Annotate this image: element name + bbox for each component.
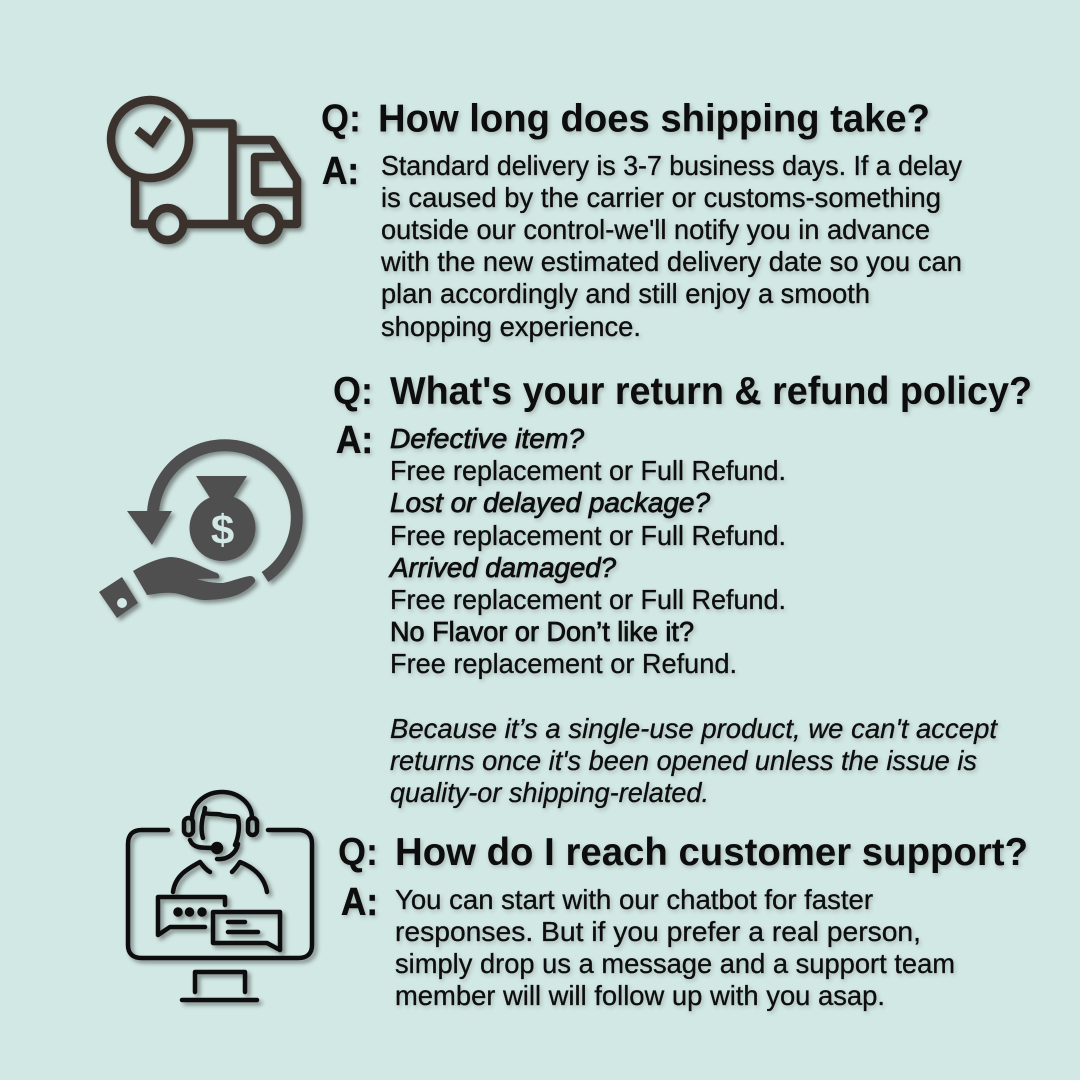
question: support: Q: [338, 831, 378, 874]
answer: shipping [322, 150, 962, 342]
answer: returns: Because it’s a single-use product, we can't accept [390, 713, 998, 744]
faq: support [338, 831, 1028, 1011]
answer: returns: returns once it's been opened unless the issue is [390, 745, 977, 776]
answer: support: A: [341, 881, 378, 924]
question: returns: What's your return & refund policy? [390, 370, 1032, 413]
icon: refund money bag over hand [99, 445, 297, 618]
answer: returns: Free replacement or Full Refund. [390, 520, 786, 551]
answer: returns: A: [336, 419, 373, 462]
icon: delivery truck with clock [111, 100, 297, 240]
question: shipping: Q: [321, 98, 361, 140]
answer: support: member will will follow up with you asap. [395, 980, 885, 1011]
answer: support: responses. But if you prefer a real person, [395, 916, 921, 947]
answer: support: simply drop us a message and a support team [395, 948, 955, 979]
answer: returns: Free replacement or Refund. [390, 648, 737, 679]
answer: shipping: Standard delivery is 3-7 business days. If a delay [381, 150, 962, 181]
answer: shipping: shopping experience. [381, 311, 641, 342]
answer: returns: No Flavor or Don’t like it? [390, 616, 694, 647]
answer: returns: Defective item? [390, 423, 585, 454]
answer: shipping: with the new estimated delivery date so you can [380, 246, 962, 277]
question: shipping: How long does shipping take? [378, 98, 930, 140]
answer: shipping: plan accordingly and still enjoy a smooth [381, 278, 870, 309]
answer: shipping: A: [322, 150, 359, 193]
answer: returns: Lost or delayed package? [390, 487, 711, 518]
answer: returns: Free replacement or Full Refund. [390, 584, 786, 615]
answer: returns: Arrived damaged? [388, 552, 617, 583]
answer: returns [336, 419, 998, 808]
answer: support: You can start with our chatbot for faster [395, 884, 873, 915]
answer: shipping: is caused by the carrier or customs-something [381, 182, 941, 213]
faq: returns [333, 370, 1032, 808]
answer: returns: Free replacement or Full Refund. [390, 455, 786, 486]
question: support: How do I reach customer support? [395, 831, 1028, 874]
faq: shipping [321, 98, 962, 342]
answer: support [341, 881, 955, 1011]
icon: customer support agent on monitor [128, 792, 312, 1000]
icon: refund money bag over hand: $ [211, 506, 234, 553]
question: returns: Q: [333, 370, 373, 413]
answer: returns: quality-or shipping-related. [390, 777, 709, 808]
answer: shipping: outside our control-we'll notify you in advance [381, 214, 930, 245]
